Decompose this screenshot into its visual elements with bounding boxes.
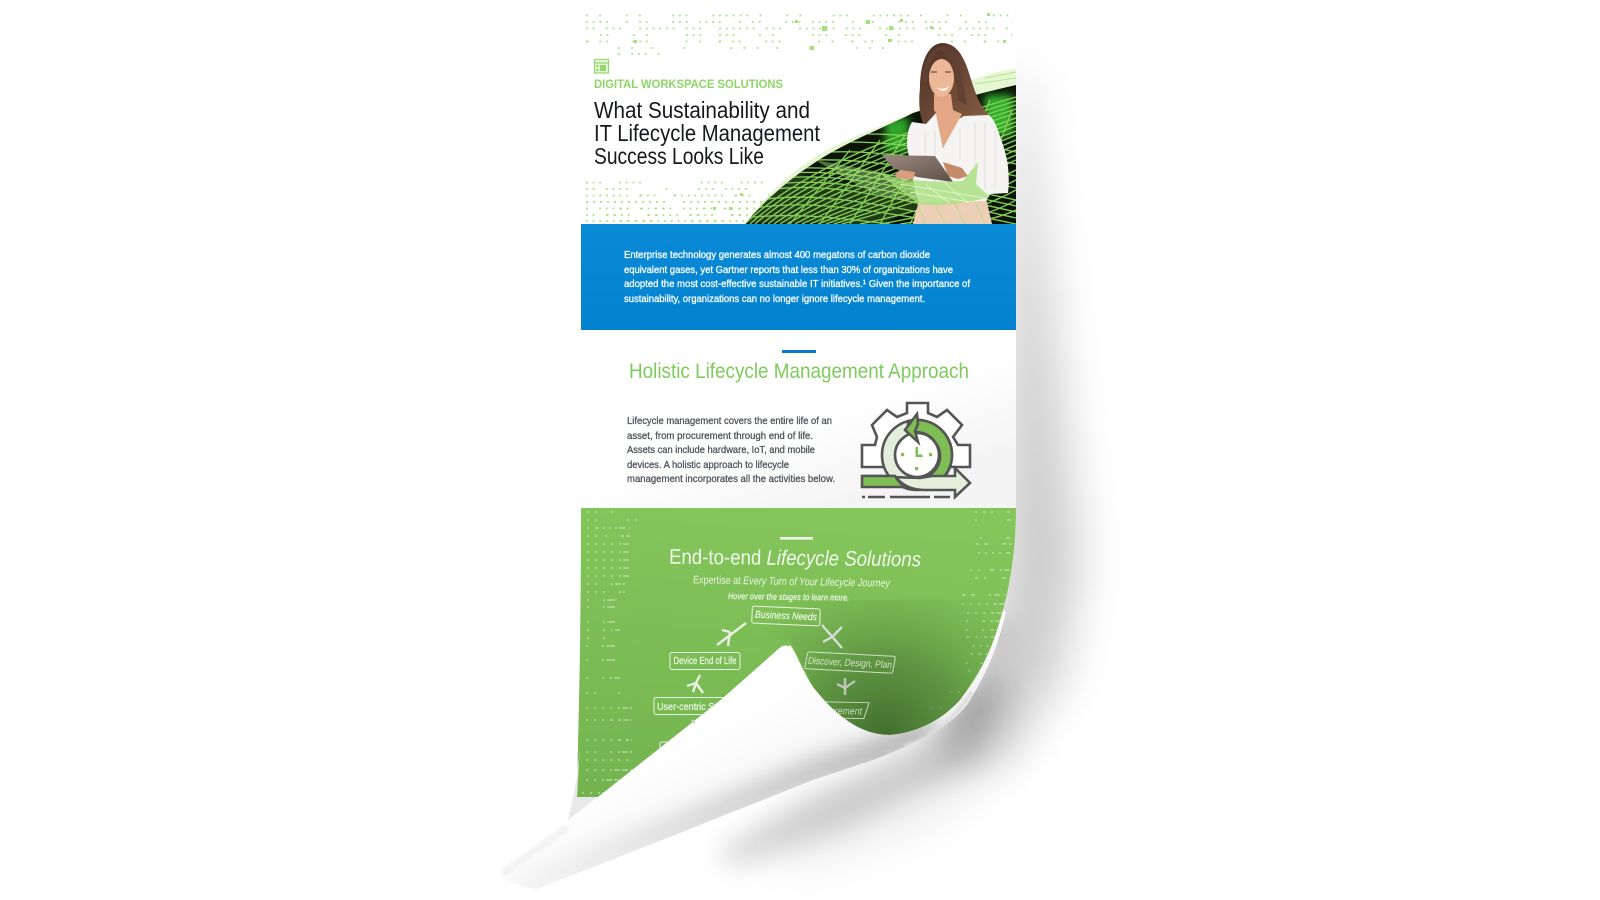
lifecycle diagram: [654, 606, 896, 759]
intro text: equivalent gases, yet Gartner reports that less than 30% of organizations have: [624, 265, 953, 276]
section heading: End-to-end Lifecycle Solutions: [669, 546, 922, 571]
right hand: [943, 162, 968, 179]
stage: discover design plan: Discover, Design, Plan: [807, 656, 893, 671]
green ribbon over figure: [880, 162, 990, 205]
intro text: adopted the most cost-effective sustainable IT initiatives.¹ Given the importance of: [624, 279, 970, 290]
tablet: [882, 155, 953, 182]
paper sheet: [577, 14, 1016, 797]
panel: holistic approach: [581, 330, 1016, 508]
panel: end-to-end lifecycle solutions: [577, 508, 1016, 797]
light mesh strip behind figure: [745, 69, 1016, 224]
intro text: Enterprise technology generates almost 400 megatons of carbon dioxide: [624, 250, 930, 261]
left hand: [894, 170, 915, 181]
page drop shadow: [720, 70, 1080, 870]
title: Success Looks Like: [594, 143, 764, 169]
icon: gear with lifecycle arrows: [862, 403, 970, 497]
body text: Lifecycle management covers the entire life of an: [627, 416, 832, 427]
stage box behind flap: [660, 742, 700, 759]
green dot patterns: [582, 512, 1012, 793]
page curl flap: [499, 610, 1006, 889]
intro text: sustainability, organizations can no longer ignore lifecycle management.: [624, 294, 925, 305]
stage: device end of life: Device End of Life: [674, 656, 737, 667]
neck: [934, 94, 962, 148]
subheading: Expertise at Every Turn of Your Lifecycle Journey: [693, 574, 891, 590]
stage: business needs: [752, 606, 820, 626]
woman with tablet: [880, 43, 1009, 224]
icon: workspace window: [594, 60, 608, 73]
body text: [627, 416, 835, 485]
hero dot pattern: [586, 16, 1012, 221]
stage: procurement: Procurement: [812, 706, 863, 718]
stage: user-centric services: User-centric Services: [657, 702, 743, 713]
panel: intro blue band: [581, 224, 1016, 330]
blouse: [907, 113, 1009, 203]
body text: devices. A holistic approach to lifecycle: [627, 460, 789, 471]
hero panel: [581, 13, 1020, 225]
body text: management incorporates all the activities below.: [627, 474, 835, 485]
section heading: Holistic Lifecycle Management Approach: [629, 360, 969, 383]
stage: device end of life: [670, 652, 740, 670]
instruction: Hover over the stages to learn more.: [728, 590, 849, 603]
body text: asset, from procurement through end of life.: [627, 431, 813, 442]
stage: business needs: Business Needs: [755, 610, 817, 623]
title: [594, 97, 820, 169]
face: [929, 59, 954, 97]
page underside sliver: [568, 745, 598, 820]
eyebrow: DIGITAL WORKSPACE SOLUTIONS: [594, 77, 783, 91]
arrows between stages: [687, 623, 855, 726]
title: What Sustainability and: [594, 97, 810, 123]
intro text: [624, 250, 970, 305]
front hair: [922, 47, 967, 105]
back hair: [919, 43, 990, 130]
stage: user-centric services: [654, 698, 746, 714]
skirt: [913, 198, 992, 224]
title: IT Lifecycle Management: [594, 120, 820, 146]
body text: Assets can include hardware, IoT, and mobile: [627, 445, 815, 456]
stage: discover design plan: [805, 652, 896, 673]
green wave mesh: [745, 85, 1016, 224]
